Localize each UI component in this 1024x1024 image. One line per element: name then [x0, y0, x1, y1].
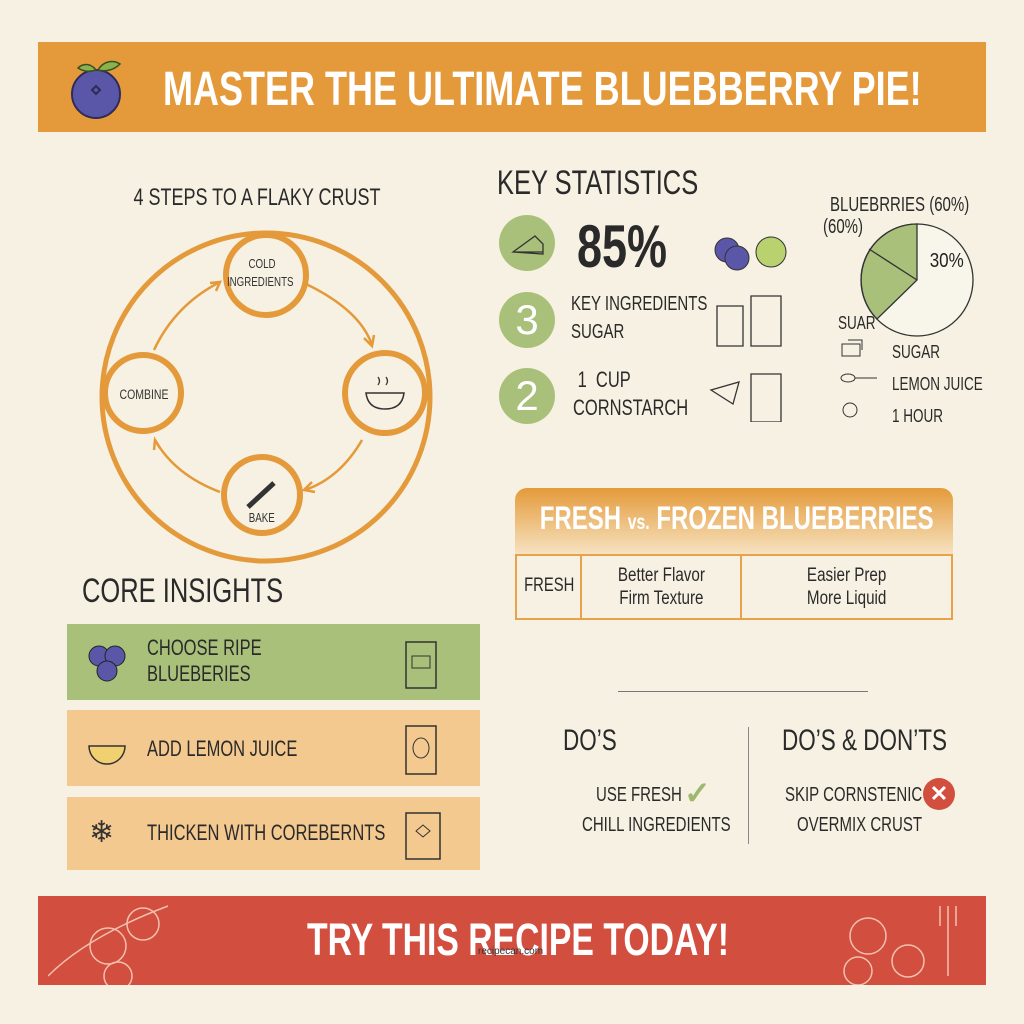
insight rows: CHOOSE RIPE	[147, 635, 262, 660]
footer banner	[38, 896, 986, 985]
stat rows: 2	[515, 372, 539, 419]
title: MASTER THE ULTIMATE BLUEBBERRY PIE!	[163, 63, 922, 116]
comparison table: Firm Texture	[619, 588, 703, 609]
pie chart: BLUEBRRIES (60%)	[830, 194, 969, 216]
don'ts column: DO’S & DON’TS	[782, 724, 947, 757]
key statistics: KEY STATISTICS	[497, 164, 698, 202]
text: ❄	[89, 816, 114, 849]
pie chart: LEMON JUICE	[892, 374, 983, 394]
pie chart: SUAR	[838, 313, 876, 333]
footer text: TRY THIS RECIPE TODAY!	[307, 914, 729, 965]
cycle diagram: INGREDIENTS	[227, 276, 294, 289]
do's column: ✓	[684, 775, 711, 811]
comparison table: Better Flavor	[617, 565, 704, 586]
do's column: CHILL INGREDIENTS	[582, 814, 731, 836]
comparison table: FRESH vs. FROZEN BLUEBERRIES	[540, 500, 934, 536]
insight rows	[67, 624, 480, 700]
pie chart: 30%	[930, 249, 964, 271]
stat rows: 1 CUP	[578, 367, 631, 392]
pie chart	[823, 194, 983, 426]
comparison table	[515, 488, 953, 620]
stat rows	[499, 213, 786, 424]
do's column: USE FRESH	[596, 784, 682, 806]
text: ADD LEMON JUICE	[147, 736, 297, 761]
cycle diagram: BAKE	[249, 512, 275, 525]
don'ts column: SKIP CORNSTENIC	[785, 784, 922, 806]
stat rows: KEY INGREDIENTS	[571, 293, 707, 315]
insight rows: BLUEBERIES	[147, 661, 251, 686]
icon: blueberry	[71, 60, 122, 119]
don'ts column	[782, 724, 955, 836]
comparison table: Easier Prep	[807, 565, 886, 586]
cycle diagram: COLD	[248, 258, 276, 271]
steps heading: 4 STEPS TO A FLAKY CRUST	[133, 184, 381, 211]
stat rows: CORNSTARCH	[573, 395, 688, 420]
don'ts column: ✕	[930, 781, 948, 806]
don'ts column: OVERMIX CRUST	[797, 814, 922, 836]
header banner	[38, 42, 986, 132]
stat rows: SUGAR	[571, 321, 624, 343]
cycle diagram	[100, 230, 432, 564]
do's column	[563, 724, 731, 836]
core insights heading: CORE INSIGHTS	[82, 572, 283, 610]
text: THICKEN WITH COREBERNTS	[147, 820, 385, 845]
footer banner: recipecan.com	[478, 946, 543, 957]
stat rows: 3	[515, 296, 539, 343]
comparison table: FRESH	[524, 575, 574, 596]
pie chart: SUGAR	[892, 342, 940, 362]
cycle diagram: COMBINE	[120, 387, 168, 402]
pie chart: (60%)	[823, 216, 863, 238]
do's column: DO’S	[563, 724, 617, 757]
stat rows: 85%	[577, 213, 667, 280]
pie chart: 1 HOUR	[892, 406, 943, 426]
comparison table: More Liquid	[807, 588, 886, 609]
